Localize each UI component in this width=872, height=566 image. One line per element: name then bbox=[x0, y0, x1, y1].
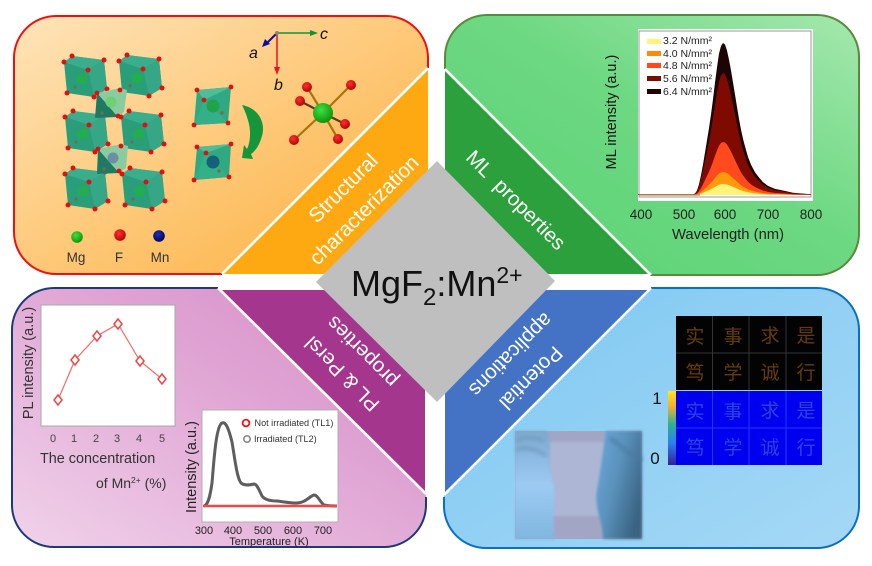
crystal structure bbox=[62, 52, 168, 212]
luminescence images: daylight row: 求 bbox=[760, 325, 780, 347]
line chart: thermoluminescence: Intensity (a.u.) bbox=[184, 421, 200, 513]
luminescence images: intensity map: 学 bbox=[723, 437, 743, 459]
band: ML properties bbox=[445, 69, 651, 275]
axes: a bbox=[249, 45, 258, 62]
title: 2+ bbox=[496, 262, 523, 288]
luminescence images: daylight row: 笃 bbox=[685, 362, 705, 384]
line chart: PL intensity bbox=[21, 305, 175, 491]
line chart: PL intensity: 2 bbox=[93, 433, 99, 445]
band: structural characterization bbox=[222, 68, 428, 274]
line chart: thermoluminescence: Irradiated (TL2) bbox=[254, 434, 317, 444]
line chart: ML spectra bbox=[604, 29, 822, 243]
panel: ML properties bbox=[445, 15, 859, 275]
ball-and-stick MgF6 bbox=[289, 80, 356, 145]
Mn octahedron bbox=[192, 142, 233, 182]
band: structural characterization: characterization bbox=[305, 151, 424, 270]
line chart: thermoluminescence: 500 bbox=[254, 525, 272, 537]
line chart: thermoluminescence: 300 bbox=[195, 525, 213, 537]
panel: PL and persistent luminescence bbox=[12, 288, 426, 548]
line chart: ML spectra: 600 bbox=[714, 207, 736, 222]
atom legend bbox=[67, 229, 169, 265]
colour bar bbox=[650, 389, 676, 468]
band: potential applications bbox=[444, 288, 651, 495]
arrow: curved green bbox=[242, 105, 263, 159]
band: PL and Persl properties bbox=[218, 288, 426, 494]
atom legend: Mg bbox=[67, 250, 85, 265]
line chart: thermoluminescence: Not irradiated (TL1) bbox=[254, 418, 333, 428]
panel: structural characterization bbox=[14, 16, 428, 274]
colour bar: 1 bbox=[652, 389, 662, 408]
colour bar: 0 bbox=[650, 449, 660, 468]
line chart: ML spectra: ML intensity (a.u.) bbox=[604, 55, 620, 169]
line chart: thermoluminescence: 400 bbox=[224, 525, 242, 537]
band: structural characterization: Structural bbox=[304, 149, 383, 228]
line chart: thermoluminescence: 600 bbox=[284, 525, 302, 537]
title: 2 bbox=[423, 284, 436, 311]
luminescence images: daylight row: 诚 bbox=[760, 362, 780, 384]
line chart: PL intensity: 3 bbox=[114, 433, 120, 445]
luminescence images: daylight row: 学 bbox=[723, 362, 743, 384]
line chart: ML spectra: 3.2 N/mm² bbox=[663, 35, 713, 47]
luminescence images: intensity map: 行 bbox=[796, 437, 816, 459]
atom legend: F bbox=[115, 250, 123, 265]
line chart: PL intensity: (%) bbox=[141, 475, 166, 491]
line chart: PL intensity: The concentration bbox=[40, 451, 155, 467]
luminescence images: intensity map: 是 bbox=[796, 401, 816, 422]
band: potential applications: Potential bbox=[494, 341, 567, 414]
line chart: ML spectra: Wavelength (nm) bbox=[672, 227, 784, 243]
line chart: ML spectra: 700 bbox=[757, 207, 779, 222]
line chart: thermoluminescence: 700 bbox=[314, 525, 332, 537]
line chart: ML spectra: 5.6 N/mm² bbox=[663, 73, 713, 85]
luminescence images: daylight row: 实 bbox=[685, 326, 705, 348]
axes: b bbox=[274, 77, 283, 94]
title: :Mn bbox=[436, 263, 496, 304]
line chart: PL intensity: of Mn bbox=[96, 475, 131, 491]
line chart: ML spectra: 500 bbox=[673, 207, 695, 222]
luminescence images: daylight row bbox=[676, 316, 822, 390]
band: potential applications: applications bbox=[464, 308, 557, 401]
luminescence images: intensity map: 实 bbox=[685, 401, 705, 423]
band: PL and Persl properties: properties bbox=[322, 311, 403, 392]
line chart: PL intensity: 4 bbox=[136, 433, 142, 445]
luminescence images: intensity map: 笃 bbox=[685, 437, 705, 459]
panel: potential applications bbox=[444, 288, 859, 548]
luminescence images: daylight row: 行 bbox=[796, 362, 816, 384]
luminescence images: daylight row: 事 bbox=[723, 326, 743, 348]
line chart: PL intensity: 2+ bbox=[131, 475, 141, 485]
central diamond bbox=[316, 161, 555, 402]
line chart: PL intensity: 0 bbox=[50, 433, 56, 445]
axes: c bbox=[320, 26, 328, 43]
Mg octahedron bbox=[192, 85, 233, 127]
photo: film between gloved fingers bbox=[515, 431, 642, 539]
line chart: PL intensity: PL intensity (a.u.) bbox=[21, 307, 37, 419]
line chart: ML spectra: 4.0 N/mm² bbox=[663, 48, 713, 60]
line chart: thermoluminescence bbox=[184, 410, 338, 548]
luminescence images: daylight row: 是 bbox=[796, 326, 816, 347]
band: ML properties: ML properties bbox=[461, 146, 570, 255]
luminescence images: intensity map: 事 bbox=[723, 401, 743, 423]
title: MgF bbox=[351, 263, 423, 304]
luminescence images: intensity map: 诚 bbox=[760, 437, 780, 459]
luminescence images: intensity map bbox=[676, 391, 822, 465]
line chart: ML spectra: 6.4 N/mm² bbox=[663, 86, 713, 98]
axes bbox=[249, 26, 328, 94]
line chart: PL intensity: 5 bbox=[159, 433, 165, 445]
line chart: ML spectra: 4.8 N/mm² bbox=[663, 60, 713, 72]
atom legend: Mn bbox=[151, 250, 169, 265]
band: PL and Persl properties: PL & Persl bbox=[300, 332, 384, 416]
line chart: ML spectra: 800 bbox=[800, 207, 822, 222]
line chart: ML spectra: 400 bbox=[630, 207, 652, 222]
line chart: PL intensity: 1 bbox=[71, 433, 77, 445]
luminescence images: intensity map: 求 bbox=[760, 400, 780, 422]
line chart: thermoluminescence: Temperature (K) bbox=[229, 536, 309, 548]
